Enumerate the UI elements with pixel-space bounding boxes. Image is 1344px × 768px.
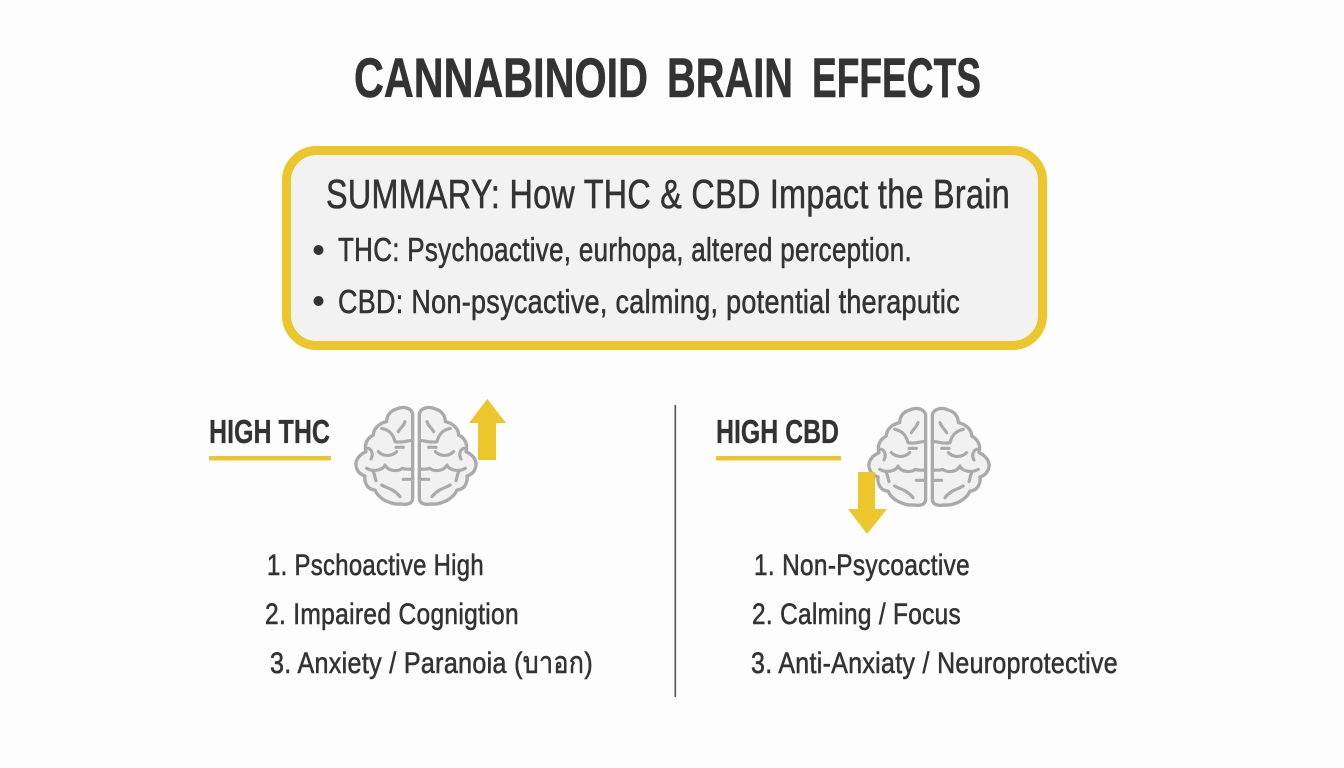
list: THC effects	[265, 549, 593, 680]
title: EFFECTS	[812, 46, 981, 109]
divider	[674, 405, 676, 697]
list: THC effects: 3. Anxiety / Paranoia (บาอก)	[270, 647, 593, 680]
summary box	[286, 150, 1042, 346]
title	[354, 46, 981, 109]
icon: brain	[869, 408, 989, 505]
bullet: CBD: CBD: Non-psycactive, calming, potential theraputic	[338, 283, 960, 320]
panel: high THC	[209, 399, 593, 680]
arrow: down	[848, 472, 887, 534]
list: CBD effects: 1. Non-Psycoactive	[754, 549, 970, 582]
list: CBD effects: 3. Anti-Anxiaty / Neuroprotective	[751, 647, 1118, 680]
heading: high CBD	[716, 413, 841, 460]
summary heading: SUMMARY: How THC & CBD Impact the Brain	[326, 171, 1010, 217]
panel: high CBD	[716, 408, 1118, 680]
list: CBD effects: 2. Calming / Focus	[752, 598, 961, 631]
panel: summary	[286, 150, 1042, 346]
icon: brain	[356, 407, 476, 504]
arrow: up	[469, 399, 506, 460]
title: BRAIN	[667, 46, 793, 109]
heading: high THC	[209, 413, 331, 460]
list: THC effects: 1. Pschoactive High	[267, 549, 484, 582]
heading: high THC: HIGH THC	[209, 413, 330, 450]
list: THC effects: 2. Impaired Cognigtion	[265, 598, 519, 631]
title: CANNABINOID	[354, 46, 648, 109]
bullet: THC: THC: Psychoactive, eurhopa, altered perception.	[338, 231, 912, 268]
heading: high CBD: HIGH CBD	[716, 413, 839, 450]
list: CBD effects	[751, 549, 1118, 680]
